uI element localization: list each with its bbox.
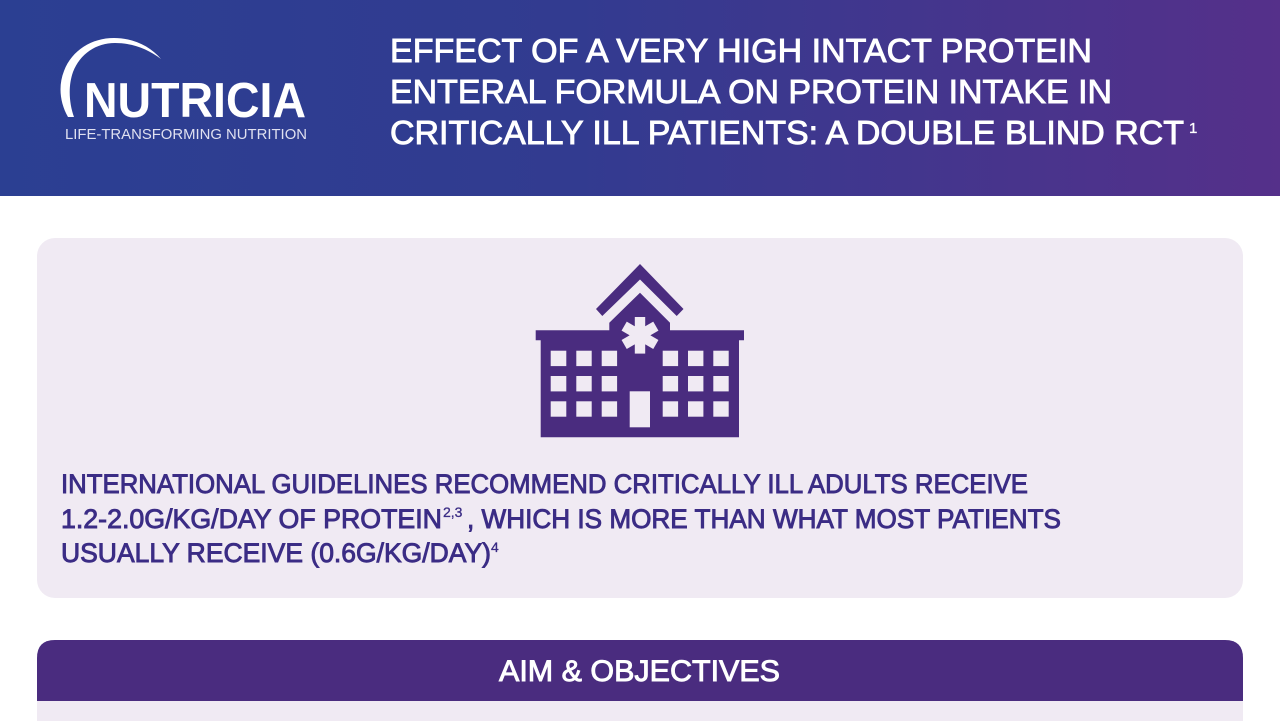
guideline text: , WHICH IS MORE THAN WHAT MOST PATIENTS — [467, 504, 1061, 534]
title: EFFECT OF A VERY HIGH INTACT PROTEIN — [390, 32, 1092, 69]
header band — [0, 0, 1280, 196]
guideline text: INTERNATIONAL GUIDELINES RECOMMEND CRITICALLY ILL ADULTS RECEIVE — [61, 469, 1028, 499]
title: 1 — [1189, 120, 1197, 137]
title: ENTERAL FORMULA ON PROTEIN INTAKE IN — [390, 73, 1112, 110]
guideline text: 4 — [491, 539, 499, 555]
aim heading bar: AIM & OBJECTIVES — [499, 655, 780, 688]
panel: aim and objectives — [37, 640, 1243, 721]
title — [390, 32, 1197, 151]
logo: Nutricia: LIFE-TRANSFORMING NUTRITION — [65, 126, 307, 143]
logo: Nutricia: NUTRICIA — [84, 74, 306, 128]
guideline text: USUALLY RECEIVE (0.6G/KG/DAY) — [61, 538, 491, 568]
guideline text: 2,3 — [443, 504, 463, 520]
aim heading bar — [37, 640, 1243, 701]
guideline text — [61, 469, 1061, 568]
logo: Nutricia — [61, 38, 307, 143]
icon: hospital — [536, 264, 744, 437]
guideline text: 1.2-2.0G/KG/DAY OF PROTEIN — [61, 504, 442, 534]
panel: guidelines — [37, 238, 1243, 598]
title: CRITICALLY ILL PATIENTS: A DOUBLE BLIND RCT — [390, 114, 1184, 151]
